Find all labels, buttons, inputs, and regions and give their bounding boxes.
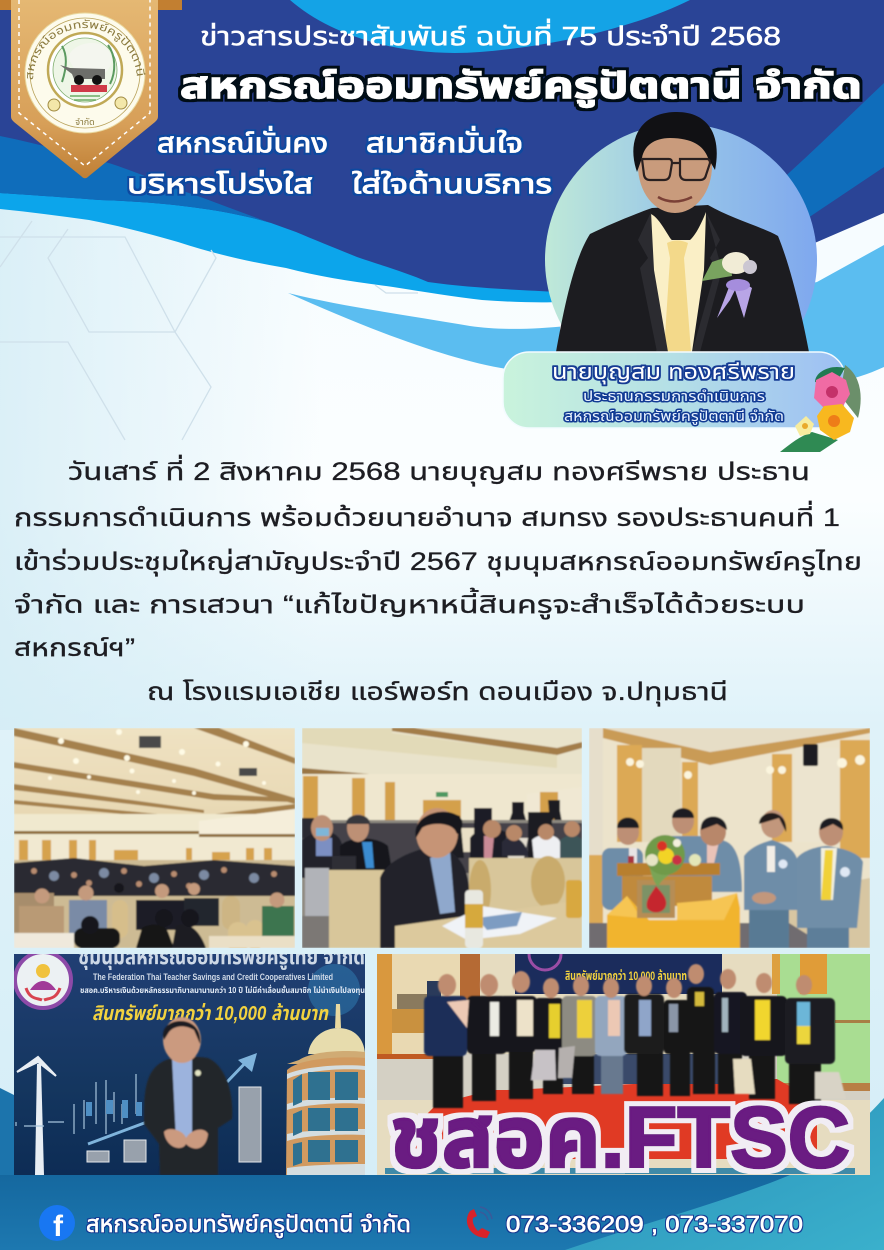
header line: newsletter issue: ข่าวสารประชาสัมพันธ์ ฉบับที่ 75 ประจำปี 2568 xyxy=(200,18,781,51)
icon: corsage xyxy=(702,252,757,318)
badge: cooperative logo ribbon xyxy=(0,0,182,178)
hexagon lines xyxy=(0,221,418,440)
body text: สหกรณ์ฯ” xyxy=(14,634,135,662)
title: cooperative name: สหกรณ์ออมทรัพย์ครูปัตตานี จำกัด xyxy=(180,65,862,107)
slogan: สมาชิกมั่นใจ xyxy=(366,126,523,158)
photo: officials at podium xyxy=(589,728,870,948)
icon: tropical flowers xyxy=(780,365,861,452)
cyan top swoosh xyxy=(290,0,690,53)
slogan: บริหารโปร่งใส xyxy=(127,169,313,199)
icon: logo seal: สหกรณ์ออมทรัพย์ครูปัตตานี xyxy=(26,19,146,80)
main dark blue field xyxy=(0,0,884,292)
slogan: ใส่ใจด้านบริการ xyxy=(352,169,552,199)
icon: facebook: f xyxy=(53,1210,64,1243)
white stripe xyxy=(560,212,884,338)
icon: logo seal: จำกัด xyxy=(75,117,95,127)
photo: chairman at federation banner xyxy=(14,944,365,1175)
photo: group with FTSC letters xyxy=(377,954,870,1186)
facebook page name: สหกรณ์ออมทรัพย์ครูปัตตานี จำกัด xyxy=(86,1211,411,1239)
medium blue lower-left xyxy=(0,136,271,223)
medium blue right stripe xyxy=(770,83,884,230)
light swoosh xyxy=(288,243,884,386)
footer: telephone xyxy=(467,1207,803,1238)
name: นายบุญสม ทองศรีพราย xyxy=(552,361,795,385)
photo: chairman seated at table xyxy=(302,728,582,948)
body text: จำกัด และ การเสวนา “แก้ไขปัญหาหนี้สินครูจะสำเร็จได้ด้วยระบบ xyxy=(14,587,805,620)
body text: เข้าร่วมประชุมใหญ่สามัญประจำปี 2567 ชุมนุมสหกรณ์ออมทรัพย์ครูไทย xyxy=(14,548,862,577)
light blue band xyxy=(0,100,600,302)
icon: logo seal xyxy=(24,12,146,134)
body text: ณ โรงแรมเอเชีย แอร์พอร์ท ดอนเมือง จ.ปทุมธานี xyxy=(147,678,728,707)
body text: วันเสาร์ ที่ 2 สิงหาคม 2568 นายบุญสม ทองศรีพราย ประธาน xyxy=(68,454,810,487)
footer: facebook xyxy=(39,1205,411,1243)
photo: conference hall audience xyxy=(14,728,295,948)
banner assets: สินทรัพย์มากกว่า 10,000 ล้านบาท xyxy=(92,1002,329,1025)
phone numbers: 073-336209 , 073-337070 xyxy=(506,1211,803,1237)
icon: facebook xyxy=(39,1205,75,1243)
icon: glasses xyxy=(642,159,710,180)
photo: group with FTSC letters: ชสอค.FTSC xyxy=(390,1090,850,1186)
icon: phone xyxy=(467,1207,492,1238)
slogan xyxy=(127,126,552,199)
organisation: สหกรณ์ออมทรัพย์ครูปัตตานี จำกัด xyxy=(564,409,784,425)
role: ประธานกรรมการดำเนินการ xyxy=(583,389,765,405)
portrait circle backdrop xyxy=(545,124,817,352)
lower corners xyxy=(0,1088,14,1180)
body text: กรรมการดำเนินการ พร้อมด้วยนายอำนาจ สมทรง รองประธานคนที่ 1 xyxy=(14,500,840,532)
portrait: chairman xyxy=(556,112,809,352)
big letters xyxy=(385,1168,855,1174)
body text xyxy=(14,454,862,707)
name plate xyxy=(503,352,845,428)
banner assets small: สินทรัพย์มากกว่า 10,000 ล้านบาท xyxy=(565,969,687,983)
slogan: สหกรณ์มั่นคง xyxy=(157,126,328,158)
